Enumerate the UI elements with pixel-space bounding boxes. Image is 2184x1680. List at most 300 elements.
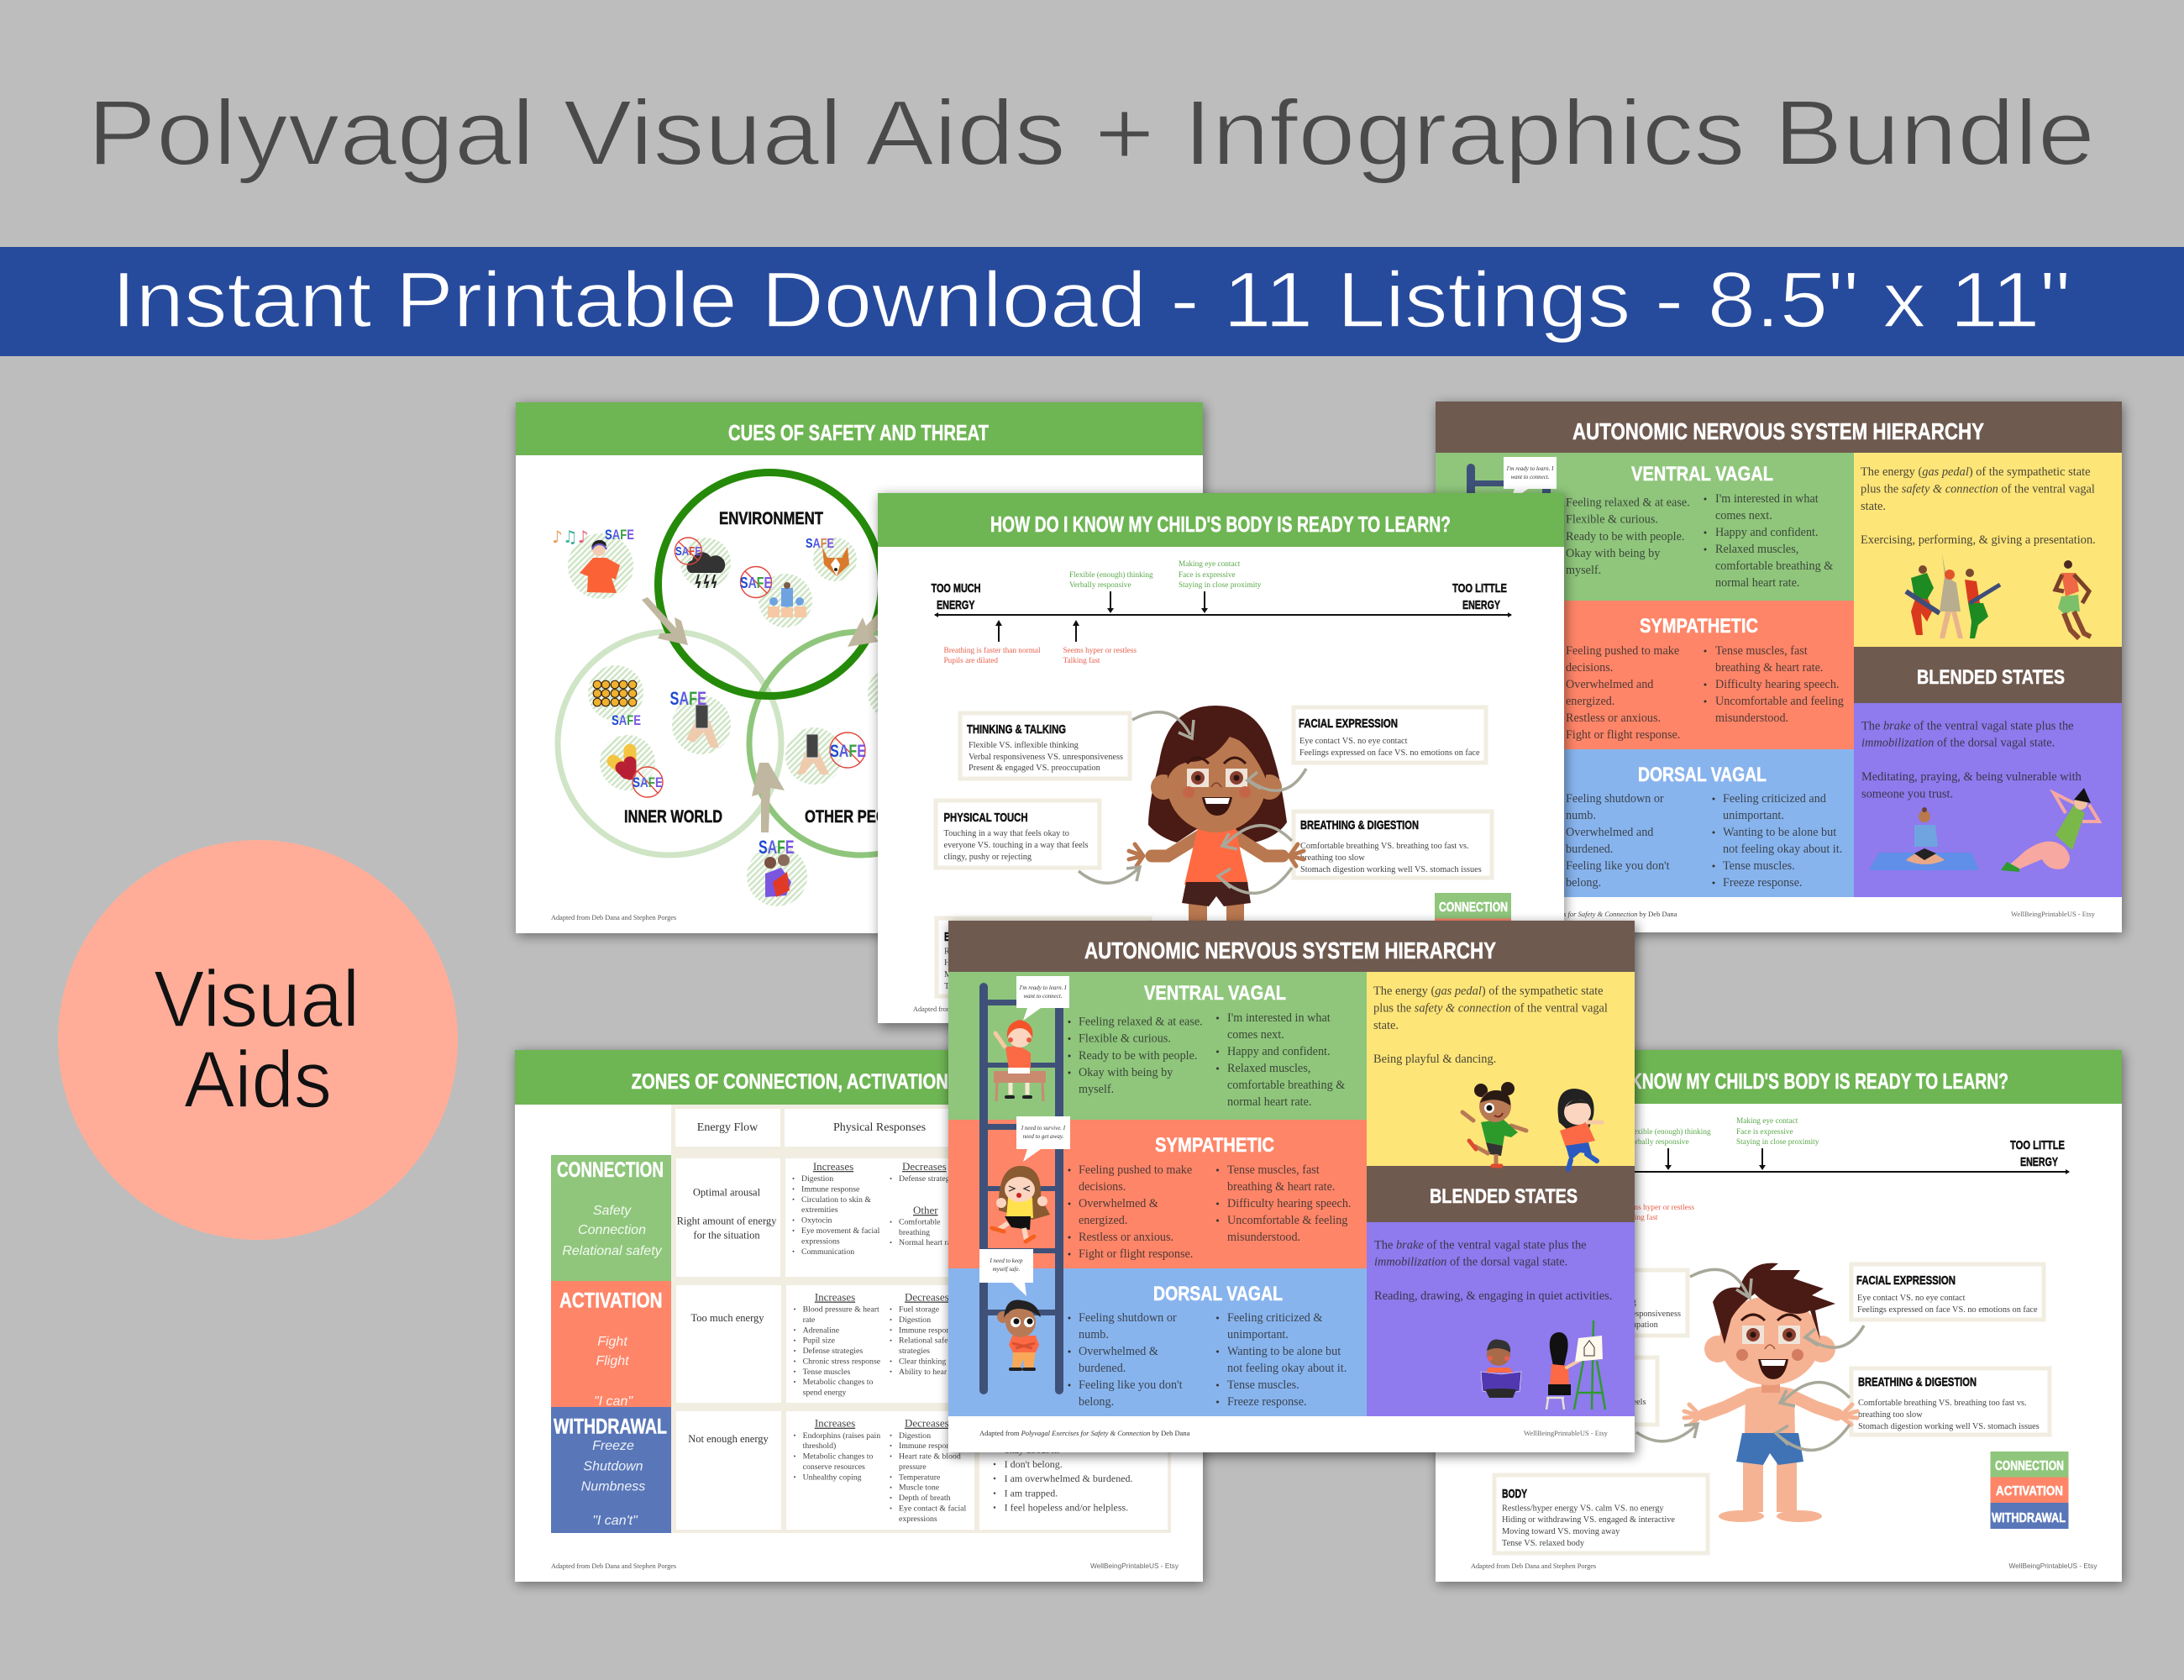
text: sympathetic list: Restless or anxious. bbox=[1079, 1231, 1173, 1244]
text: sympathetic list: energized. bbox=[1079, 1214, 1127, 1227]
box: breathing and digestion: breathing too slow bbox=[1300, 853, 1365, 863]
box: body: Tense VS. relaxed body bbox=[1502, 1539, 1585, 1548]
text: ventral vagal list bbox=[1566, 492, 1833, 590]
character: dorsal child bbox=[997, 1299, 1041, 1369]
box: physical touch: Touching in a way that feels okay to bbox=[944, 829, 1069, 838]
text: ventral vagal list: Happy and confident. bbox=[1715, 526, 1819, 539]
panel: cues of safety and threat bbox=[516, 402, 1205, 936]
icon: phone in hand not safe bbox=[785, 727, 866, 785]
icon: corgi safe: SAFE bbox=[806, 537, 834, 551]
box: body: Hiding or withdrawing VS. engaged & interactive bbox=[944, 958, 1117, 968]
text: dorsal vagal list: Feeling criticized and bbox=[1723, 792, 1826, 806]
physical responses: connection: expressions bbox=[801, 1236, 840, 1246]
physical responses: withdrawal: expressions bbox=[899, 1515, 937, 1524]
table grid bbox=[671, 1105, 1171, 1533]
text: dorsal blend description: The brake of the ventral vagal state plus the bbox=[1861, 719, 2074, 732]
label: too little energy bbox=[1452, 581, 1507, 612]
text: red signs: Seems hyper or restless bbox=[1621, 1204, 1694, 1212]
heading: sympathetic: SYMPATHETIC bbox=[1640, 615, 1758, 638]
text: sympathetic blend description: plus the safety & connection of the ventral vagal bbox=[1373, 1001, 1608, 1015]
box: physical touch bbox=[1494, 1357, 1657, 1425]
zone: activation: Flight bbox=[596, 1354, 629, 1368]
circle: other people bbox=[749, 632, 973, 855]
text: dorsal blend description: immobilization of the dorsal vagal state. bbox=[1861, 736, 2055, 749]
text: dorsal vagal list: Wanting to be alone but bbox=[1227, 1345, 1341, 1358]
physical responses: withdrawal: Heart rate & blood bbox=[899, 1452, 961, 1462]
zone: connection bbox=[551, 1155, 671, 1281]
zone: activation: Fight bbox=[597, 1335, 627, 1349]
physical responses: connection: Digestion bbox=[801, 1174, 833, 1184]
physical responses: connection bbox=[793, 1160, 959, 1257]
zone: withdrawal: "I can't" bbox=[592, 1514, 638, 1528]
box: breathing and digestion: Comfortable breathing VS. breathing too fast vs. bbox=[1858, 1399, 2027, 1408]
physical responses: withdrawal: Increases bbox=[815, 1417, 855, 1430]
text: green signs: Face is expressive bbox=[1179, 571, 1236, 580]
text: dorsal vagal list: belong. bbox=[1079, 1395, 1114, 1409]
legend: CONNECTION bbox=[1995, 1459, 2064, 1473]
physical responses: activation: Fuel storage bbox=[899, 1305, 940, 1314]
character: ventral child at desk bbox=[994, 1020, 1046, 1101]
text: ventral vagal list: Relaxed muscles, bbox=[1227, 1062, 1310, 1075]
zone: activation: "I can" bbox=[594, 1394, 633, 1409]
text: ventral vagal list: Okay with being by bbox=[1566, 547, 1661, 560]
text: red signs: Talking fast bbox=[1063, 656, 1100, 665]
icon: emotions: SAFE bbox=[612, 712, 641, 728]
label: too much energy: TOO MUCH bbox=[931, 581, 981, 596]
text: green signs: Making eye contact bbox=[1736, 1117, 1798, 1126]
text: dorsal vagal list: Feeling shutdown or bbox=[1566, 792, 1664, 806]
box: body bbox=[1494, 1475, 1708, 1553]
text: sympathetic list: misunderstood. bbox=[1715, 711, 1788, 725]
text: sympathetic list: Tense muscles, fast bbox=[1227, 1163, 1320, 1177]
text: dorsal vagal list: Freeze response. bbox=[1723, 876, 1803, 890]
box: body: Moving toward VS. moving away bbox=[944, 970, 1063, 979]
text: dorsal blend description: immobilization of the dorsal vagal state. bbox=[1374, 1255, 1567, 1268]
footer note: Adapted from Deb Dana and Stephen Porges bbox=[551, 1562, 676, 1570]
text: dorsal vagal list: not feeling okay about it. bbox=[1227, 1362, 1347, 1375]
icon: emotions bbox=[588, 665, 643, 728]
icon: phone in hand safe: SAFE bbox=[670, 688, 706, 709]
text: ventral vagal list: myself. bbox=[1566, 564, 1601, 577]
physical responses: withdrawal: Immune response bbox=[899, 1441, 958, 1451]
footer note: Adapted from Polyvagal Exercises for Safety & Connection by Deb Dana bbox=[1467, 910, 1677, 918]
text: sympathetic list: breathing & heart rate. bbox=[1715, 661, 1823, 675]
text: dorsal vagal list: unimportant. bbox=[1723, 809, 1784, 822]
physical responses: withdrawal: Depth of breath bbox=[899, 1494, 951, 1503]
text: sympathetic list: Overwhelmed & bbox=[1079, 1197, 1158, 1210]
icon: musicians bbox=[1906, 554, 2000, 638]
footer note: Adapted from Deb Dana and Stephen Porges bbox=[551, 914, 676, 921]
box: facial expression: Feelings expressed on face VS. no emotions on face bbox=[1299, 748, 1480, 758]
text: red signs: Seems hyper or restless bbox=[1063, 647, 1137, 655]
physical responses: activation: Defense strategies bbox=[803, 1347, 863, 1356]
icon: meditating person bbox=[1869, 807, 1979, 870]
physical responses: withdrawal: threshold) bbox=[803, 1441, 836, 1451]
text: dorsal blend description: Meditating, praying, & being vulnerable with bbox=[1861, 770, 2082, 784]
energy flow text: Not enough energy bbox=[688, 1433, 769, 1445]
icon: pills not safe bbox=[600, 735, 663, 797]
text: dorsal vagal list: not feeling okay about it. bbox=[1723, 843, 1842, 856]
text: sympathetic list: Difficulty hearing speech. bbox=[1715, 678, 1839, 691]
box: body: Hiding or withdrawing VS. engaged & interactive bbox=[1502, 1515, 1675, 1525]
text: sympathetic list: Restless or anxious. bbox=[1566, 711, 1661, 725]
banner: instant printable download: Instant Printable Download - 11 Listings - 8.5" x 11" bbox=[112, 255, 2071, 344]
box: body: BODY bbox=[1502, 1487, 1527, 1501]
text: ventral vagal list: I'm interested in what bbox=[1227, 1011, 1331, 1025]
text: green signs: Staying in close proximity bbox=[1736, 1138, 1819, 1147]
label: too little energy: ENERGY bbox=[2020, 1155, 2058, 1169]
icon: child reading bbox=[1481, 1340, 1521, 1398]
box: physical touch: clingy, pushy or rejecting bbox=[1502, 1410, 1589, 1419]
text: ventral vagal list: Feeling relaxed & at ease. bbox=[1079, 1015, 1203, 1028]
withdrawal feelings list: I am overwhelmed & burdened. bbox=[1005, 1473, 1133, 1484]
physical responses: activation: Blood pressure & heart bbox=[803, 1305, 879, 1314]
box: body: Moving toward VS. moving away bbox=[1502, 1527, 1620, 1536]
speech bubble bbox=[1504, 457, 1557, 501]
heading: autonomic hierarchy: AUTONOMIC NERVOUS SYSTEM HIERARCHY bbox=[1572, 418, 1984, 444]
text: dorsal vagal list: numb. bbox=[1566, 809, 1596, 822]
text: dorsal blend description: someone you trust. bbox=[1861, 788, 1953, 801]
withdrawal feelings list: I don't belong. bbox=[1005, 1458, 1063, 1470]
text: green signs: Verbally responsive bbox=[1069, 581, 1131, 590]
icon: storm cloud not safe bbox=[675, 538, 731, 588]
withdrawal feelings list: I feel hopeless and/or helpless. bbox=[1005, 1502, 1128, 1514]
box: physical touch: Touching in a way that feels okay to bbox=[1502, 1386, 1627, 1395]
energy flow text bbox=[677, 1186, 777, 1445]
text: ventral vagal list: Okay with being by bbox=[1079, 1066, 1173, 1079]
banner: instant printable download bbox=[0, 247, 2184, 356]
text: dorsal vagal list: Feeling shutdown or bbox=[1079, 1311, 1177, 1325]
speech bubble: I'm ready to learn. I bbox=[1506, 465, 1554, 472]
heading: dorsal vagal: DORSAL VAGAL bbox=[1638, 764, 1767, 786]
physical responses: activation: Chronic stress response bbox=[803, 1357, 881, 1366]
physical responses: connection: Increases bbox=[813, 1160, 853, 1173]
text: ventral vagal list: Relaxed muscles, bbox=[1715, 543, 1798, 556]
box: physical touch: everyone VS. touching in a way that feels bbox=[1502, 1398, 1646, 1407]
box: facial expression: Eye contact VS. no eye contact bbox=[1857, 1294, 1966, 1303]
footer credit: WellBeingPrintableUS - Etsy bbox=[2009, 1562, 2097, 1570]
text: sympathetic list bbox=[1069, 1163, 1351, 1261]
physical responses: activation: Ability to hear bbox=[899, 1368, 948, 1377]
heading: zones: ZONES OF CONNECTION, ACTIVATION & WITHDRAWAL bbox=[632, 1070, 1088, 1094]
text: ventral vagal list: Happy and confident. bbox=[1227, 1045, 1331, 1058]
text: sympathetic list: Fight or flight response. bbox=[1566, 728, 1680, 742]
box: facial expression bbox=[1851, 1264, 2044, 1320]
icon: hug safe: SAFE bbox=[759, 837, 795, 858]
text: ventral vagal list: Flexible & curious. bbox=[1079, 1032, 1171, 1045]
physical responses: activation: Immune response bbox=[899, 1326, 958, 1335]
box: breathing and digestion bbox=[1294, 811, 1492, 878]
circle: environment bbox=[659, 472, 882, 696]
text: ventral vagal list: comfortable breathing & bbox=[1227, 1079, 1345, 1092]
withdrawal feelings list: I am trapped. bbox=[1005, 1488, 1058, 1499]
physical responses: connection: breathing bbox=[899, 1228, 930, 1237]
zone: connection: Connection bbox=[578, 1223, 646, 1237]
ladder top bbox=[1467, 464, 1551, 514]
text: sympathetic blend description: The energy (gas pedal) of the sympathetic state bbox=[1373, 984, 1603, 998]
text: dorsal vagal list: Feeling criticized & bbox=[1227, 1311, 1322, 1325]
box: breathing and digestion bbox=[1851, 1368, 2050, 1435]
physical responses: activation: rate bbox=[803, 1315, 816, 1325]
label: too much energy bbox=[931, 581, 981, 612]
badge: visual aids: Visual bbox=[154, 954, 360, 1044]
text: ventral vagal list: I'm interested in what bbox=[1715, 492, 1819, 506]
text: sympathetic list: breathing & heart rate. bbox=[1227, 1180, 1335, 1194]
text: sympathetic blend description: state. bbox=[1373, 1019, 1399, 1032]
label: other people: OTHER PEOPLE bbox=[805, 807, 914, 827]
energy spectrum line bbox=[1492, 1148, 2070, 1174]
text: dorsal vagal list: unimportant. bbox=[1227, 1328, 1289, 1341]
footer note: Adapted from Polyvagal Exercises for Safety & Connection by Deb Dana bbox=[979, 1429, 1190, 1437]
box: breathing and digestion: BREATHING & DIGESTION bbox=[1858, 1375, 1977, 1389]
box: thinking and talking: Flexible VS. inflexible thinking bbox=[1526, 1298, 1636, 1307]
physical responses: activation: spend energy bbox=[803, 1388, 846, 1398]
physical responses: connection: Defense strategies bbox=[899, 1174, 959, 1184]
text: dorsal blend description: The brake of the ventral vagal state plus the bbox=[1374, 1238, 1587, 1252]
energy flow text: Too much energy bbox=[690, 1312, 764, 1324]
text: sympathetic list: misunderstood. bbox=[1227, 1231, 1300, 1244]
heading: sympathetic: SYMPATHETIC bbox=[1155, 1134, 1274, 1157]
legend: ACTIVATION bbox=[1996, 1484, 2063, 1499]
box: breathing and digestion: BREATHING & DIGESTION bbox=[1300, 818, 1419, 832]
label: too much energy: ENERGY bbox=[937, 598, 974, 612]
physical responses: activation: Metabolic changes to bbox=[803, 1378, 873, 1387]
panel: autonomic hierarchy (front) bbox=[948, 921, 1636, 1456]
text: dorsal vagal list: Wanting to be alone but bbox=[1723, 826, 1836, 839]
physical responses: connection: Eye movement & facial bbox=[801, 1226, 880, 1236]
box: breathing and digestion: Stomach digestion working well VS. stomach issues bbox=[1300, 865, 1482, 874]
icon: phone in hand not safe: SAFE bbox=[830, 742, 866, 761]
text: red signs: Breathing is faster than normal bbox=[944, 646, 1041, 655]
icon: person listening to music bbox=[552, 527, 633, 599]
heading: ventral vagal: VENTRAL VAGAL bbox=[1631, 463, 1773, 486]
panel: autonomic hierarchy (top right) bbox=[1436, 402, 2124, 935]
text: dorsal vagal list: Overwhelmed & bbox=[1079, 1345, 1158, 1358]
text: dorsal vagal list: belong. bbox=[1566, 876, 1601, 890]
box: breathing and digestion: breathing too slow bbox=[1858, 1410, 1923, 1420]
box: physical touch bbox=[936, 801, 1100, 868]
ladder bbox=[979, 983, 1063, 1394]
icon: hug safe bbox=[747, 837, 807, 906]
circle: inner world bbox=[558, 632, 781, 855]
speech bubble: want to connect. bbox=[1510, 474, 1550, 480]
text: red signs bbox=[1621, 1204, 1694, 1222]
text: sympathetic list: Feeling pushed to make bbox=[1566, 644, 1679, 658]
text: dorsal blend description bbox=[1861, 719, 2082, 801]
icon: phone in hand safe bbox=[670, 688, 731, 754]
physical responses: withdrawal: Metabolic changes to bbox=[803, 1452, 873, 1462]
physical responses: connection: Immune response bbox=[801, 1184, 860, 1194]
column headings: Physical Responses bbox=[833, 1121, 926, 1134]
label: inner world: INNER WORLD bbox=[624, 807, 722, 827]
icon: runner bbox=[2055, 560, 2091, 638]
heading: HOW DO I KNOW MY CHILD'S BODY IS READY TO LEARN? bbox=[1548, 1068, 2008, 1094]
speech bubble: ventral: want to connect. bbox=[1023, 993, 1063, 1000]
speech bubble: sympathetic bbox=[1016, 1116, 1070, 1162]
title: Polyvagal Visual Aids + Infographics Bundle bbox=[87, 81, 2095, 185]
arrows: body pointers bbox=[1636, 1269, 1864, 1450]
text: dorsal vagal list bbox=[1566, 792, 1842, 890]
icon: dancing child one bbox=[1462, 1082, 1526, 1166]
box: facial expression: FACIAL EXPRESSION bbox=[1856, 1273, 1956, 1288]
text: safe: SAFE bbox=[605, 527, 634, 543]
box: body: Tense VS. relaxed body bbox=[944, 982, 1027, 991]
zone: connection: CONNECTION bbox=[557, 1158, 664, 1182]
box: facial expression: Feelings expressed on face VS. no emotions on face bbox=[1857, 1305, 2038, 1315]
text: sympathetic blend description: state. bbox=[1861, 500, 1886, 513]
text: sympathetic list: decisions. bbox=[1566, 661, 1613, 675]
text: ventral vagal list: Flexible & curious. bbox=[1566, 512, 1658, 526]
box: body: Restless/hyper energy VS. calm VS. no energy bbox=[1502, 1504, 1664, 1514]
text: sympathetic list: Feeling pushed to make bbox=[1079, 1163, 1192, 1177]
arrow: environment to inner world bbox=[642, 597, 688, 645]
heading: HOW DO I KNOW MY CHILD'S BODY IS READY TO LEARN? bbox=[990, 512, 1451, 537]
zone: withdrawal: Shutdown bbox=[583, 1460, 643, 1473]
heading: cues: CUES OF SAFETY AND THREAT bbox=[728, 420, 989, 445]
text: green signs: Making eye contact bbox=[1179, 560, 1241, 569]
icon: pills not safe: SAFE bbox=[633, 775, 663, 790]
box: thinking and talking bbox=[1518, 1270, 1688, 1336]
icon: dancing child two bbox=[1558, 1089, 1602, 1169]
box: facial expression bbox=[1294, 707, 1486, 763]
text: ventral vagal list: myself. bbox=[1079, 1083, 1114, 1096]
physical responses: withdrawal: Eye contact & facial bbox=[899, 1504, 967, 1514]
zone: withdrawal: Freeze bbox=[592, 1439, 634, 1453]
zone: withdrawal bbox=[551, 1407, 671, 1533]
legend: WITHDRAWAL bbox=[1992, 1511, 2066, 1525]
speech bubble: dorsal: myself safe. bbox=[993, 1266, 1021, 1273]
box: physical touch: PHYSICAL TOUCH bbox=[944, 811, 1028, 825]
speech bubble: sympathetic: need to get away. bbox=[1023, 1133, 1064, 1140]
panel: girl body readiness bbox=[878, 493, 1566, 1027]
icon: audience not safe: SAFE bbox=[740, 575, 772, 591]
icon: hidden circle other people bbox=[868, 666, 921, 720]
box: thinking and talking: THINKING & TALKING bbox=[967, 722, 1066, 737]
column headings bbox=[697, 1121, 926, 1134]
text: dorsal blend description: Reading, drawing, & engaging in quiet activities. bbox=[1374, 1289, 1612, 1303]
text: dorsal vagal list: Freeze response. bbox=[1227, 1395, 1307, 1409]
text: sympathetic blend description: Exercising, performing, & giving a presentation. bbox=[1861, 533, 2096, 547]
illustration: boy bbox=[1684, 1263, 1857, 1522]
physical responses: activation: Clear thinking bbox=[899, 1357, 946, 1366]
legend bbox=[1991, 1452, 2068, 1529]
legend: CONNECTION bbox=[1439, 900, 1508, 915]
energy flow text: Right amount of energy bbox=[677, 1215, 777, 1227]
text: dorsal vagal list: Tense muscles. bbox=[1227, 1378, 1299, 1392]
text: dorsal vagal list bbox=[1069, 1311, 1347, 1409]
icon: storm cloud not safe: SAFE bbox=[675, 544, 701, 559]
label: environment: ENVIRONMENT bbox=[719, 509, 823, 528]
physical responses: connection: Normal heart rate bbox=[899, 1238, 958, 1247]
box: thinking and talking: Verbal responsiveness VS. unresponsiveness bbox=[1526, 1310, 1681, 1319]
heading: blended states: BLENDED STATES bbox=[1430, 1185, 1578, 1208]
speech bubble: ventral bbox=[1016, 976, 1069, 1021]
text: sympathetic blend description bbox=[1861, 465, 2096, 547]
zone: activation bbox=[551, 1281, 671, 1409]
speech bubble: ventral: I'm ready to learn. I bbox=[1019, 984, 1067, 991]
physical responses: withdrawal: Decreases bbox=[905, 1417, 949, 1430]
box: facial expression: Eye contact VS. no eye contact bbox=[1299, 737, 1408, 746]
panel: boy body readiness bbox=[1436, 1050, 2124, 1584]
physical responses: connection: Comfortable bbox=[899, 1218, 941, 1227]
box: thinking and talking: Present & engaged VS. preoccupation bbox=[1526, 1320, 1658, 1330]
physical responses: activation: Decreases bbox=[905, 1290, 949, 1304]
box: body: BODY bbox=[944, 930, 969, 944]
character: sympathetic child bbox=[992, 1166, 1050, 1242]
physical responses: withdrawal: Muscle tone bbox=[899, 1483, 940, 1493]
text: sympathetic list: Uncomfortable & feeling bbox=[1227, 1214, 1347, 1227]
physical responses: connection: Oxytocin bbox=[801, 1216, 832, 1226]
text: red signs bbox=[944, 646, 1137, 665]
energy flow text: for the situation bbox=[693, 1229, 760, 1241]
zone: connection: Relational safety bbox=[562, 1244, 663, 1258]
physical responses: connection: extremities bbox=[801, 1205, 838, 1215]
legend bbox=[1435, 893, 1511, 944]
box: breathing and digestion: Comfortable breathing VS. breathing too fast vs. bbox=[1300, 842, 1469, 851]
text: dorsal vagal list: Feeling like you don't bbox=[1079, 1378, 1183, 1392]
badge: visual aids: Aids bbox=[184, 1035, 332, 1125]
text: dorsal vagal list: Feeling like you don't bbox=[1566, 859, 1670, 873]
footer note: Adapted from Deb Dana and Stephen Porges bbox=[913, 1005, 1038, 1013]
physical responses: activation: Digestion bbox=[899, 1315, 931, 1325]
footer credit: WellBeingPrintableUS - Etsy bbox=[1524, 1429, 1609, 1437]
text: sympathetic blend description: plus the safety & connection of the ventral vagal bbox=[1861, 482, 2095, 496]
text: ventral vagal list: normal heart rate. bbox=[1715, 576, 1799, 590]
panel: zones of connection, activation and withdrawal bbox=[515, 1050, 1204, 1584]
text: green signs: Verbally responsive bbox=[1627, 1138, 1689, 1147]
text: green signs: Flexible (enough) thinking bbox=[1069, 570, 1153, 580]
physical responses: connection: Other bbox=[913, 1204, 938, 1216]
physical responses: activation: Relational safety bbox=[899, 1336, 954, 1346]
text: ventral vagal list: comes next. bbox=[1227, 1028, 1284, 1042]
box: thinking and talking: Present & engaged VS. preoccupation bbox=[969, 764, 1100, 773]
physical responses: activation: Increases bbox=[815, 1290, 855, 1304]
physical responses: activation bbox=[795, 1290, 958, 1398]
footer note: Adapted from Deb Dana and Stephen Porges bbox=[1471, 1562, 1596, 1570]
text: sympathetic list: Tense muscles, fast bbox=[1715, 644, 1808, 658]
text: sympathetic blend description: The energy (gas pedal) of the sympathetic state bbox=[1861, 465, 2090, 479]
physical responses: activation: Adrenaline bbox=[803, 1326, 840, 1335]
text: sympathetic blend description: Being playful & dancing. bbox=[1373, 1053, 1496, 1066]
box: thinking and talking bbox=[960, 713, 1130, 779]
footer credit: WellBeingPrintableUS - Etsy bbox=[2011, 910, 2096, 918]
icon: audience not safe bbox=[740, 566, 812, 627]
physical responses: withdrawal: Temperature bbox=[899, 1473, 941, 1482]
heading: ventral vagal: VENTRAL VAGAL bbox=[1144, 982, 1286, 1005]
withdrawal feelings list: okay about it. bbox=[1005, 1444, 1059, 1456]
zone: withdrawal: WITHDRAWAL bbox=[554, 1415, 667, 1438]
text: green signs: Staying in close proximity bbox=[1179, 581, 1262, 590]
text: dorsal vagal list: Overwhelmed and bbox=[1566, 826, 1653, 839]
box: body bbox=[937, 918, 1150, 996]
text: dorsal vagal list: burdened. bbox=[1079, 1362, 1126, 1375]
box: physical touch: clingy, pushy or rejecting bbox=[944, 853, 1032, 862]
text: sympathetic list: Fight or flight response. bbox=[1079, 1247, 1193, 1261]
withdrawal feelings list bbox=[995, 1444, 1133, 1514]
text: ventral vagal list: comfortable breathing & bbox=[1715, 559, 1833, 573]
text: green signs: Face is expressive bbox=[1736, 1128, 1793, 1137]
heading: dorsal vagal: DORSAL VAGAL bbox=[1153, 1283, 1283, 1305]
energy spectrum line bbox=[934, 591, 1512, 642]
text: dorsal vagal list: numb. bbox=[1079, 1328, 1109, 1341]
text: ventral vagal list: comes next. bbox=[1715, 509, 1772, 522]
icon: child painting at easel bbox=[1546, 1320, 1605, 1410]
text: green signs bbox=[1069, 560, 1262, 590]
box: thinking and talking: Flexible VS. inflexible thinking bbox=[969, 741, 1079, 750]
text: ventral vagal list: normal heart rate. bbox=[1227, 1095, 1311, 1109]
arrows: body pointers bbox=[1079, 712, 1306, 893]
text: dorsal blend description bbox=[1374, 1238, 1612, 1303]
